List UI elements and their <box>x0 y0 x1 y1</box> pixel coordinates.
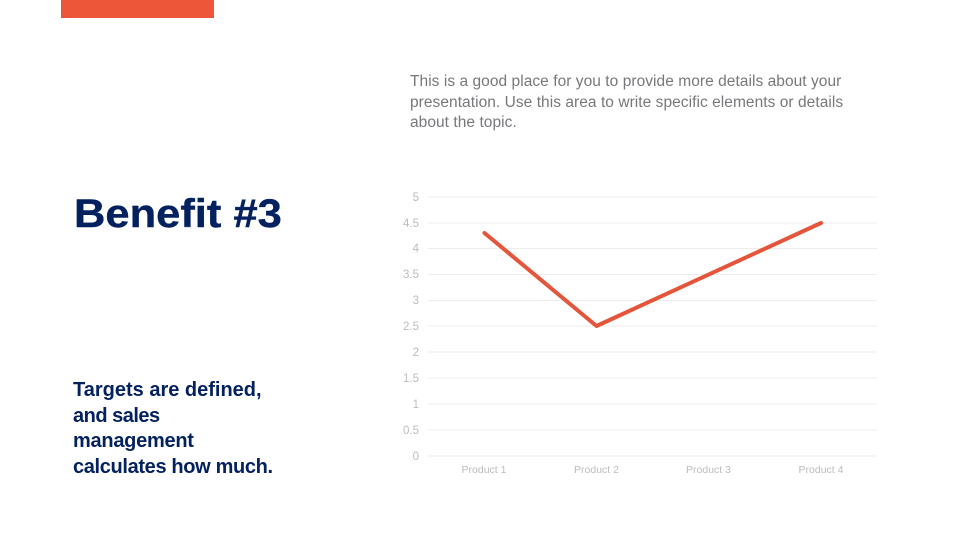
y axis labels: 2.5 <box>403 321 419 333</box>
description text: about the topic. <box>410 114 517 131</box>
subheading text: calculates how much. <box>73 456 273 478</box>
x axis labels: Product 2 <box>574 464 619 476</box>
subheading text: management <box>73 430 194 452</box>
x axis labels <box>462 464 844 476</box>
description text: This is a good place for you to provide more details about your <box>410 73 841 90</box>
accent bar <box>61 0 214 18</box>
y axis labels: 0 <box>413 451 419 463</box>
y axis labels: 0.5 <box>403 425 419 437</box>
subheading text: and sales <box>73 404 160 426</box>
y axis labels: 2 <box>413 347 419 359</box>
subheading text: Targets are defined, <box>73 379 262 401</box>
line chart <box>403 192 877 476</box>
y axis labels: 3.5 <box>403 269 419 281</box>
y axis labels: 1 <box>413 399 419 411</box>
x axis labels: Product 4 <box>799 464 844 476</box>
description text: presentation. Use this area to write specific elements or details <box>410 94 843 110</box>
data line <box>484 223 821 326</box>
title: Benefit #3 <box>74 192 282 236</box>
x axis labels: Product 1 <box>462 464 507 476</box>
y axis labels: 5 <box>413 192 419 204</box>
subheading text <box>73 379 273 478</box>
y axis labels: 4.5 <box>403 218 419 230</box>
y axis labels: 3 <box>413 295 419 307</box>
y axis labels: 4 <box>413 243 420 255</box>
description text <box>410 73 843 131</box>
x axis labels: Product 3 <box>686 464 731 476</box>
y axis labels <box>403 192 420 463</box>
y axis labels: 1.5 <box>403 373 419 385</box>
